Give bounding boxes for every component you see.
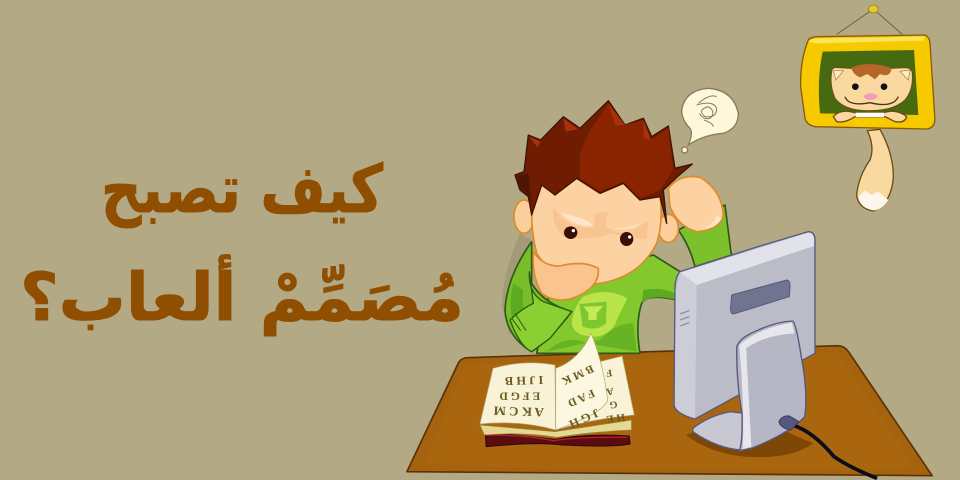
cat eyes: [852, 83, 859, 90]
book letters: A: [605, 385, 615, 397]
cat nose: [864, 93, 877, 100]
face: [532, 178, 661, 284]
book: [480, 333, 634, 447]
book letters: A K C M: [493, 404, 544, 419]
left arm: [505, 242, 572, 352]
cat hair: [851, 64, 892, 79]
book letters: [493, 362, 626, 431]
book letters: E F G D: [499, 389, 540, 401]
cat mouth: [845, 97, 898, 105]
fist on chin: [533, 252, 598, 300]
cat head: [831, 64, 912, 111]
book cover: [485, 433, 630, 447]
raised arm sleeve: [678, 205, 732, 267]
lion emblem: [572, 292, 627, 337]
cat paws: [833, 111, 907, 122]
hanging string and nail: [837, 5, 902, 34]
book pages block: [480, 420, 631, 437]
book letters: B M K: [560, 362, 596, 387]
table: [407, 346, 932, 476]
frame window: [819, 50, 918, 115]
monitor body: [674, 232, 815, 419]
cable plug: [779, 416, 799, 430]
computer monitor: [674, 232, 815, 419]
ears: [514, 200, 534, 233]
title: how to become a game designer: [20, 151, 464, 336]
raised hand: [668, 176, 723, 232]
left page: [480, 363, 556, 430]
monitor vent slot: [731, 280, 790, 314]
hair: [515, 101, 692, 223]
shadow behind boy: [502, 233, 532, 337]
title line 1: كيف تصبح: [101, 151, 384, 228]
eyes: [564, 226, 577, 239]
book letters: F: [605, 367, 613, 378]
cat tail: [857, 129, 893, 211]
book letters: G: [608, 398, 618, 410]
hanging cat picture: [801, 5, 935, 211]
monitor stand: [693, 321, 877, 478]
stand base: [693, 412, 786, 450]
book letters: H E: [606, 411, 626, 425]
stand neck: [737, 321, 806, 451]
turning page: [556, 333, 608, 430]
book letters: I J H B: [505, 373, 543, 388]
boy character: [502, 88, 738, 353]
title line 2: مُصَمِّمْ ألعاب؟: [20, 254, 464, 336]
monitor shadow: [686, 413, 813, 457]
frame: [801, 35, 935, 129]
book letters: J G H: [566, 406, 602, 431]
brow shading: [553, 207, 648, 240]
thought bubble: [682, 88, 738, 153]
book letters: F A D: [566, 387, 596, 409]
back right page: [562, 356, 634, 428]
cable: [793, 425, 877, 478]
torso: [537, 255, 682, 353]
